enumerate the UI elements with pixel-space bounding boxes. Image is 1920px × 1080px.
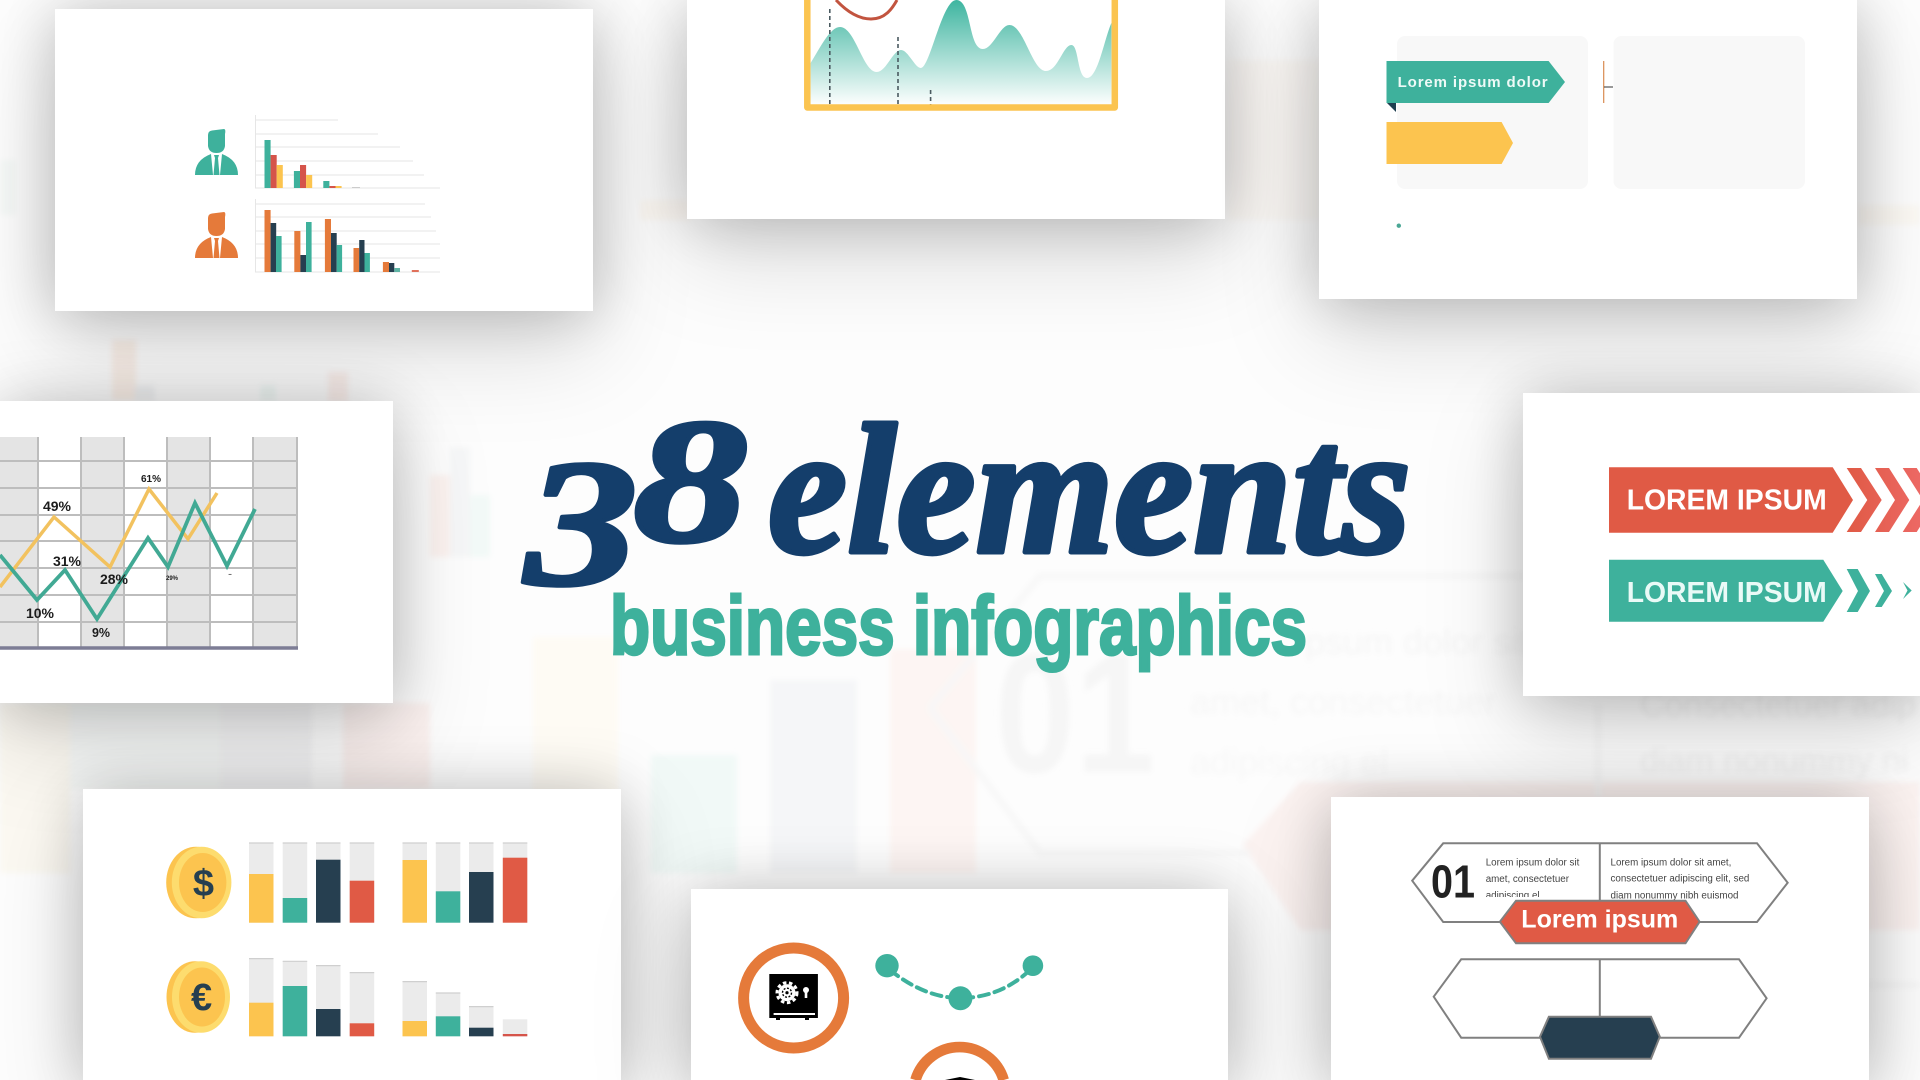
placeholder box right [1614,36,1805,189]
teal chevrons [1847,569,1912,612]
timeline dots [875,954,1043,1010]
icon: dollar coin: $ [193,863,214,905]
blurred background collage: diam nonummy ni [1640,742,1908,780]
text block left: Lorem ipsum dolor sit [1486,857,1580,868]
bar caps [249,843,527,1007]
chart: dollar bars left [249,843,374,923]
panel: ribbon labels [1319,0,1857,299]
title: elements [768,387,1411,593]
icon: euro coin [166,961,230,1033]
panel: people bar charts [55,9,593,311]
chart value labels: 31% [53,553,82,569]
panel: line chart [0,401,393,703]
red arrow banner: LOREM IPSUM [1627,484,1827,516]
icon: ring with safe [744,948,844,1048]
blurred background collage: psum dolor sit [1305,621,1529,662]
upper hexagon [1412,843,1788,922]
chart: teal group bars [256,115,440,188]
icon: ring lower [916,1047,1004,1080]
blurred background collage: Consectetuer adip [1640,686,1916,724]
lower hexagon [1434,959,1767,1038]
panel: arrow banners [1523,393,1920,696]
chart value labels: – [228,572,232,578]
chart value labels: 61% [141,474,161,485]
icon: teal businessman [195,129,238,175]
panel: currency bars [83,789,621,1080]
panel: hexagon text blocks [1331,797,1869,1080]
chart: red curve [836,0,897,19]
dark hexagon label [1540,1017,1660,1059]
blurred background collage: 01 [995,619,1155,809]
text block right: consectetuer adipiscing elit, sed [1610,874,1749,885]
icon: euro coin: € [191,977,212,1019]
text block right [1610,857,1749,901]
yellow ribbon [1386,122,1513,164]
chart frame [807,0,1115,108]
panel: icon timeline [691,889,1228,1080]
text block left: adipiscing el [1486,890,1540,901]
chart: orange group bars [256,199,440,272]
icon: orange businessman [195,212,238,258]
chart: teal area [811,0,1111,106]
chart value labels: 28% [100,571,129,587]
icon: dollar coin [166,847,231,918]
dashed connector [890,970,1030,998]
red hexagon label [1500,901,1700,943]
subtitle: business infographics [610,579,1307,672]
text block left [1486,858,1580,897]
teal arrow banner: LOREM IPSUM [1627,577,1827,609]
teal ribbon: Lorem ipsum dolor [1398,74,1548,91]
number: 01 [1431,855,1475,907]
teal ribbon [1386,61,1565,103]
chart value labels: 29% [166,576,179,582]
ribbon fold [1387,103,1396,112]
placeholder box left [1397,36,1588,189]
chart value labels: 9% [92,626,110,640]
red hexagon label: Lorem ipsum [1521,905,1678,933]
text block right: diam nonummy nibh euismod [1610,890,1738,901]
red arrow banner [1609,467,1853,533]
chart: euro bars left [249,958,374,1036]
panel: area chart [687,0,1225,219]
chart value labels: 10% [26,605,55,621]
blurred background collage: adipiscing el [1190,741,1388,782]
timeline tick [1603,61,1605,103]
blurred background collage: amet, consectetuer [1190,681,1496,722]
chart: yellow line [0,489,217,587]
chart: euro bars right [402,981,527,1036]
teal dot [1397,224,1401,228]
title: 3 [523,424,638,624]
chart: dollar bars right [402,843,527,923]
chart: teal line [0,503,255,619]
text block left: amet, consectetuer [1486,874,1570,885]
chart value labels [26,474,232,640]
title: 8 [633,382,748,580]
text block right: Lorem ipsum dolor sit amet, [1610,857,1731,868]
chart grid [0,437,298,648]
red chevrons [1847,468,1920,532]
chart value labels: 49% [43,498,72,514]
chart: dashed markers [830,9,931,106]
teal arrow banner [1609,560,1843,622]
title [523,382,1411,624]
